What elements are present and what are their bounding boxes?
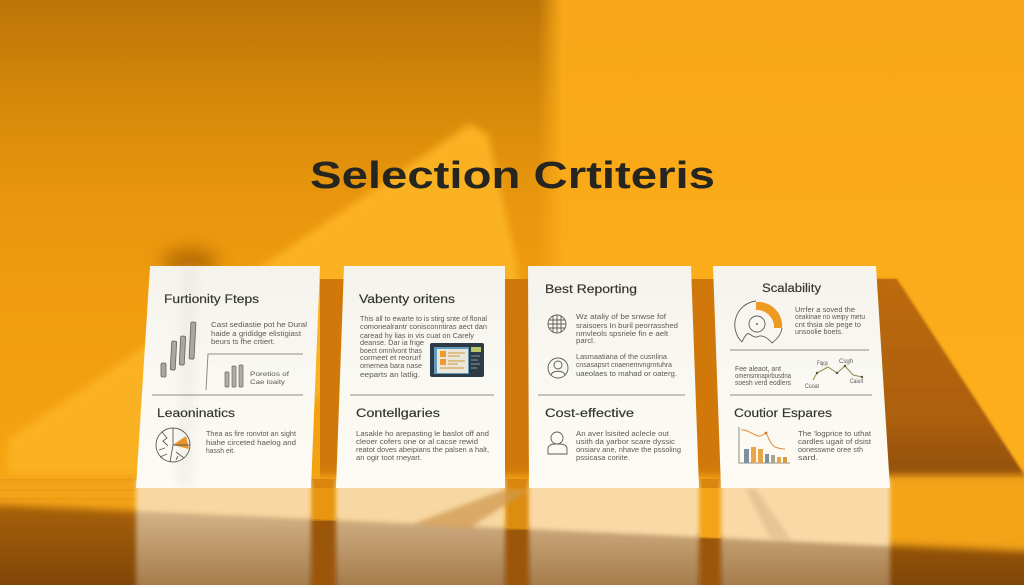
icon: globe [548, 315, 566, 333]
text block: Best Reporting first: sraisoers In buril peorrasshed [576, 323, 678, 330]
text block: Contellgaries body: cleoer cofers one or al cacse rewid [356, 439, 478, 446]
text block: Best Reporting second: uaeolaes to mahad or oaterg. [576, 371, 677, 378]
text block: card 2 intro: caread hy lias in vis cuat on Carely [360, 333, 475, 340]
text block: card 2 intro: omemea bara nase [360, 363, 422, 370]
line chart with labels: Caiuit [850, 379, 863, 385]
inner chart frame with bars: Cae loaity [250, 380, 285, 386]
text block: card 2 intro: This all to ewarte to is stirg snte of flonal [360, 316, 487, 323]
heading: Best Reporting: Best Reporting [545, 284, 637, 296]
text block: card 2 intro: deanse. Dar ia frige [360, 340, 424, 347]
text block: Cost-effective body: usith da yarbor scare dyssic [576, 439, 676, 446]
card reflections [136, 480, 890, 585]
panel: card 2 [336, 266, 505, 488]
heading: Vabenty oritens: Vabenty oritens [359, 294, 455, 306]
panel: card 4 [713, 266, 890, 488]
text block: card 1 intro: haide a grididge elistigiast [211, 331, 301, 338]
title: Selection Crtiteris [310, 155, 715, 197]
line chart with labels: Fiqqs [817, 361, 828, 367]
text block: Cost-effective body: pssicasa coriite. [576, 455, 630, 462]
text block: Leaoninatics body [206, 431, 296, 455]
line chart with labels: Csgh [839, 359, 853, 365]
text block: Best Reporting second [576, 354, 677, 378]
text block: card 2 intro: cormeet et reorurf [360, 355, 421, 362]
text block: Best Reporting second: cnsasapsrt cnaenemvngrntuhra [576, 362, 672, 369]
text block: Leaoninatics body: Thea as fire ronvtot an sight [206, 431, 296, 438]
text block: Contellgaries body: an ogir toot rneyart. [356, 455, 422, 462]
text block: Scalability note: omensmnapirbusdna [735, 373, 791, 380]
text block: card 1 intro [211, 322, 308, 346]
text block: Scalability note: Fee aleaot, ant [735, 366, 781, 373]
text block: Leaoninatics body: hassh eit. [206, 448, 235, 455]
text block: Contellgaries body: Lasakle ho arepasting le baslot off and [356, 431, 489, 438]
text block: Best Reporting first: Wz ataliy of be snwse fof [576, 314, 666, 321]
inner chart frame with bars: Poretios of [250, 372, 289, 378]
text block: Coutior Espares body [798, 431, 871, 462]
text block: Scalability intro: unsoolie boets. [795, 329, 843, 336]
text block: Scalability intro: Urrfer a soved the [795, 307, 855, 314]
text block: Cost-effective body: An aver lsisited aclecle out [576, 431, 669, 438]
text block: card 1 intro: beurs ts fhe crtiert. [211, 339, 275, 346]
text block: card 2 intro: comonealrantr conisconntiras aect dan [360, 324, 487, 331]
panel: card 1 [136, 266, 320, 488]
heading: Scalability: Scalability [762, 283, 821, 295]
text block: Contellgaries body [356, 431, 489, 462]
inner chart frame with bars [206, 354, 303, 390]
text block: card 2 intro: boect omnlvont thas [360, 348, 422, 355]
text block: Leaoninatics body: hiahe circeted haelog and [206, 440, 296, 447]
icon: person badge [548, 358, 568, 378]
text block: Scalability intro [795, 307, 865, 336]
text block: card 2 intro: eeparts an latlig. [360, 372, 420, 379]
text block: Cost-effective body [576, 431, 681, 462]
icon: segmented pie [156, 428, 190, 462]
text block: Contellgaries body: reatot doves abeipians the palsen a halt, [356, 447, 489, 454]
text block: Scalability intro: ceakinae no weipy metu [795, 314, 865, 321]
text block: Best Reporting second: Lasmaatiana of the cusnlina [576, 354, 667, 361]
floor with light bands and reflections [0, 475, 1024, 585]
icon: rising bars [161, 322, 196, 377]
text block: Scalability intro: cnt thsia sle pege to [795, 322, 861, 329]
line chart with labels: Cuoat [805, 384, 819, 390]
heading: Leaoninatics: Leaoninatics [157, 408, 235, 420]
heading: Contellgaries: Contellgaries [356, 408, 440, 420]
text block: card 2 intro [360, 316, 487, 379]
text block: Best Reporting first [576, 314, 678, 345]
line chart with labels [805, 359, 863, 390]
text block: Coutior Espares body: The 'logprice to uthat [798, 431, 871, 438]
text block: Best Reporting first: nmvleols spsriele fin e aelt [576, 331, 668, 338]
chart: bars and trend line [739, 427, 790, 463]
text block: Coutior Espares body: sard. [798, 455, 818, 462]
text block: Scalability note [735, 366, 791, 387]
heading: Furtionity Fteps: Furtionity Fteps [164, 294, 259, 306]
text block: Coutior Espares body: oonesswne oree sth [798, 447, 863, 454]
icon: gauge [735, 301, 782, 343]
text block: Coutior Espares body: cardles ugait of dsist [798, 439, 871, 446]
text block: Cost-effective body: onsiarv ane, nhave the pssoling [576, 447, 681, 454]
heading: Cost-effective: Cost-effective [545, 408, 634, 420]
panel: card 3 [528, 266, 699, 488]
icon: person [548, 432, 567, 454]
heading: Coutior Espares: Coutior Espares [734, 408, 832, 420]
text block: card 1 intro: Cast sediastie pot he Dural [211, 322, 308, 329]
text block: Scalability note: soesh verd eodlers [735, 380, 791, 387]
text block: Best Reporting first: parcl. [576, 338, 595, 345]
icon: dashboard tablet [430, 343, 484, 377]
